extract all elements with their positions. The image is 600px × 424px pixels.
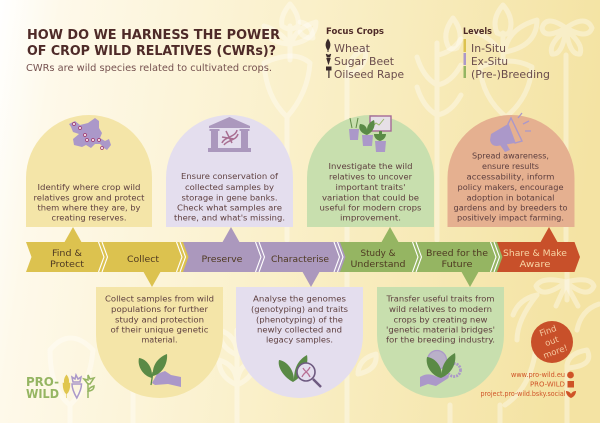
text: Investigate the wild <box>328 161 412 171</box>
icon: megaphone <box>490 113 531 152</box>
chevron labels: Future <box>442 259 473 270</box>
panel: share and make aware <box>448 113 574 227</box>
text <box>105 294 214 344</box>
panel: preserve <box>166 115 293 227</box>
icon: map of Europe with pins <box>69 118 111 150</box>
legend: levels: Levels <box>463 27 492 37</box>
text: wild relatives to modern <box>389 304 492 314</box>
text: Transfer useful traits from <box>385 294 495 304</box>
panel: collect <box>96 287 223 398</box>
text: Collect samples from wild <box>105 294 214 304</box>
text: gardens and by breeders to <box>454 202 568 212</box>
text: crops by creating new <box>394 314 488 324</box>
icon: oilseed rape <box>326 66 332 78</box>
connector pointers <box>64 227 558 287</box>
legend: focus crops <box>326 27 404 81</box>
icon: wheat <box>326 40 330 52</box>
text: (phenotyping) of the <box>256 314 343 324</box>
icon: hand with plant, globe and gear <box>420 350 460 387</box>
text <box>34 182 144 222</box>
contact links <box>480 371 576 398</box>
text <box>320 161 422 222</box>
text: ensure results <box>482 161 539 171</box>
logo: PRO-WILD: PRO- <box>26 375 59 389</box>
icon: butterfly <box>566 391 576 398</box>
icon: linkedin <box>568 381 574 388</box>
text: policy makers, encourage <box>458 182 564 192</box>
chevron labels: Preserve <box>202 254 243 265</box>
text: creating reserves. <box>52 212 126 222</box>
legend: focus crops: Sugar Beet <box>334 56 394 68</box>
text: legacy samples. <box>266 334 333 344</box>
text: Ensure conservation of <box>181 171 278 181</box>
text: Check what samples are <box>177 202 282 212</box>
contact links: project.pro-wild.bsky.social <box>480 390 566 398</box>
panel: breed for the future <box>377 287 504 398</box>
contact links: PRO-WILD <box>530 380 565 388</box>
text: Identify where crop wild <box>38 182 140 192</box>
text: (genotyping) and traits <box>251 304 348 314</box>
text: useful for modern crops <box>320 202 422 212</box>
text: relatives grow and protect <box>34 192 144 202</box>
chevron labels: Collect <box>127 254 159 265</box>
chevron: share and make aware <box>491 242 580 272</box>
text: Analyse the genomes <box>253 294 346 304</box>
text <box>454 150 568 222</box>
text <box>385 294 495 344</box>
text: newly collected and <box>257 324 342 334</box>
chevron: collect <box>98 242 188 272</box>
icon: wheat <box>63 375 70 398</box>
title <box>27 27 280 59</box>
chevron: find and protect <box>26 242 110 272</box>
callout: find out more: out <box>544 335 561 349</box>
legend: levels <box>463 27 550 81</box>
chevron labels <box>50 248 567 270</box>
logo: PRO-WILD <box>26 375 94 401</box>
legend: focus crops: Wheat <box>334 43 370 55</box>
text: important traits' <box>336 182 406 192</box>
legend: levels: In-Situ <box>471 43 506 55</box>
text: relatives to uncover <box>329 172 413 182</box>
legend: focus crops: Focus Crops <box>326 27 384 37</box>
icon: web <box>567 372 574 378</box>
text: populations for further <box>111 304 209 314</box>
chevron labels: Share & Make <box>503 248 567 259</box>
text: Spread awareness, <box>472 150 549 160</box>
text: for the breeding industry. <box>386 334 495 344</box>
panel: find and protect <box>26 115 152 227</box>
text <box>174 171 285 222</box>
chevron: breed for the future <box>412 242 502 272</box>
text <box>251 294 348 344</box>
icon: potted plants and monitor <box>349 116 391 152</box>
callout: find out more <box>531 321 573 363</box>
chevron labels: Understand <box>350 259 406 270</box>
title: HOW DO WE HARNESS THE POWER <box>27 27 280 43</box>
text: there, and what's missing. <box>174 212 285 222</box>
chevron: study and understand <box>334 242 424 272</box>
contact links: www.pro-wild.eu <box>511 371 565 379</box>
subtitle: CWRs are wild species related to cultivated crops. <box>26 63 272 74</box>
icon: oilseed rape <box>84 375 94 398</box>
chevron: characterise <box>255 242 346 272</box>
icon: gene bank temple with DNA <box>208 117 251 152</box>
callout: find out more: more! <box>542 343 569 361</box>
icon: hand holding seedling <box>139 354 181 387</box>
chevron: preserve <box>177 242 266 272</box>
chevron labels: Aware <box>520 259 551 270</box>
icon: seedling under magnifying glass <box>279 355 321 387</box>
panel: characterise <box>236 287 363 398</box>
text: collected samples by <box>185 182 274 192</box>
text: study and protection <box>115 314 204 324</box>
text: of their unique genetic <box>110 324 208 334</box>
timeline chevron arrow <box>26 227 580 287</box>
text: adoption in botanical <box>466 192 554 202</box>
chevron labels: Find & <box>52 248 82 259</box>
legend: levels: (Pre-)Breeding <box>471 69 550 81</box>
text: positively impact farming. <box>457 212 564 222</box>
text: accessability, inform <box>466 172 555 182</box>
panel: study and understand <box>307 115 434 227</box>
chevron labels: Study & <box>360 248 396 259</box>
title: OF CROP WILD RELATIVES (CWRs)? <box>27 43 276 59</box>
text: them where they are, by <box>38 202 141 212</box>
text: 'genetic material bridges' <box>386 324 495 334</box>
text: storage in gene banks. <box>182 192 278 202</box>
callout: find out more: Find <box>538 324 558 339</box>
legend: focus crops: Oilseed Rape <box>334 69 404 81</box>
chevron labels: Breed for the <box>426 248 488 259</box>
text: improvement. <box>340 212 401 222</box>
text: material. <box>142 334 178 344</box>
chevron labels: Characterise <box>271 254 329 265</box>
text: variation that could be <box>322 192 419 202</box>
icon: sugar beet <box>326 54 331 64</box>
legend: levels: Ex-Situ <box>471 56 508 68</box>
icon: sugar beet <box>72 375 82 398</box>
chevron labels: Protect <box>50 259 84 270</box>
logo: PRO-WILD: WILD <box>26 387 59 401</box>
